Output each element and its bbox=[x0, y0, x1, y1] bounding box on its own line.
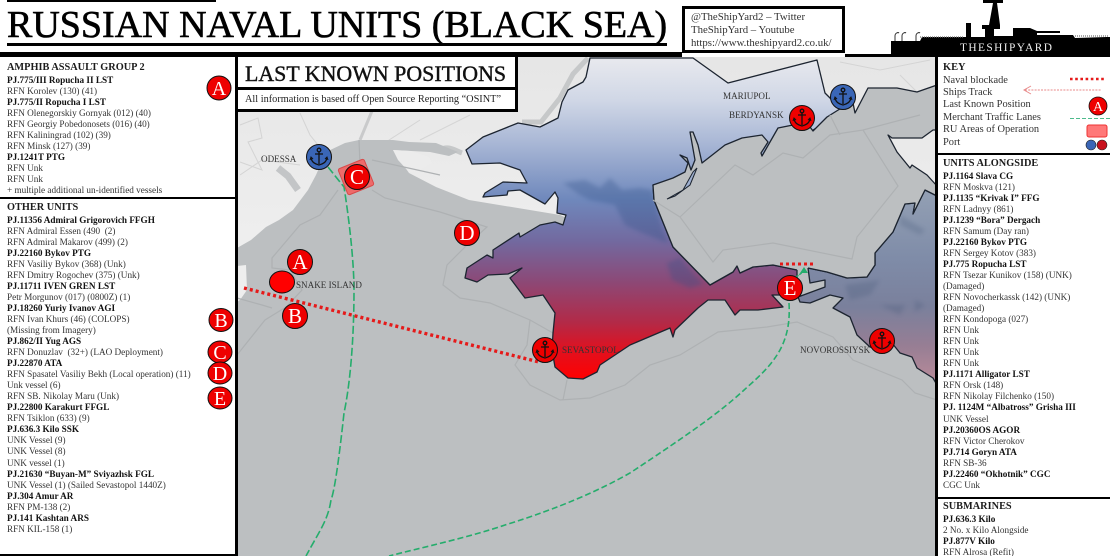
unit list: other: PJ.11356 Admiral Grigorovich FFGH bbox=[7, 214, 155, 224]
unit list: other: RFN Ivan Khurs (46) (COLOPS) bbox=[7, 314, 130, 324]
unit list: amphib: RFN Unk bbox=[7, 163, 43, 173]
unit list: alongside: RFN Unk bbox=[943, 336, 979, 346]
unit list: other: RFN PM-138 (2) bbox=[7, 502, 70, 512]
Arbat lagoon sliver bbox=[667, 168, 697, 199]
heading: key: KEY bbox=[943, 62, 966, 73]
unit list: other: UNK Vessel (9) bbox=[7, 435, 66, 445]
marker: D: D bbox=[459, 221, 475, 245]
panel: amphib assault group 2 bbox=[0, 57, 235, 197]
marker: C bbox=[344, 164, 370, 190]
unit list: other bbox=[7, 214, 191, 534]
social links box: @TheShipYard2 – Twitter TheShipYard – Youtube https://www.theshipyard2.co.uk/ bbox=[691, 11, 832, 49]
marker: B bbox=[282, 304, 308, 328]
unit list: alongside: (Damaged) bbox=[943, 303, 984, 313]
unit list: alongside: RFN Samum (Day ran) bbox=[943, 226, 1029, 236]
panel: other units bbox=[0, 199, 235, 554]
unit list: alongside: RFN Moskva (121) bbox=[943, 182, 1015, 192]
unit list: alongside: PJ.1135 “Krivak I” FFG bbox=[943, 193, 1039, 203]
marker: C: C bbox=[350, 165, 364, 189]
marker: E bbox=[778, 276, 802, 300]
marker: Mariupol port bbox=[830, 84, 856, 110]
unit list: submarines: 2 No. x Kilo Alongside bbox=[943, 525, 1028, 535]
unit list: alongside: PJ.1164 Slava CG bbox=[943, 170, 1013, 180]
place labels: ODESSA bbox=[261, 154, 297, 164]
unit list: alongside: PJ.1171 Alligator LST bbox=[943, 369, 1030, 379]
unit list: other: PJ.11711 IVEN GREN LST bbox=[7, 281, 115, 291]
panel: units alongside bbox=[937, 155, 1110, 497]
left panel frame bbox=[235, 57, 238, 556]
top accent bar bbox=[7, 0, 216, 2]
place labels: SEVASTOPOL bbox=[562, 345, 619, 355]
panel: key bbox=[937, 57, 1110, 153]
unit list: amphib: PJ.1241T PTG bbox=[7, 152, 65, 162]
place labels: SNAKE ISLAND bbox=[296, 280, 362, 290]
marker: E: E bbox=[784, 276, 796, 300]
marker: Sevastopol port bbox=[532, 338, 558, 362]
unit list: other: (Missing from Imagery) bbox=[7, 325, 96, 335]
maritime boundary lines bbox=[237, 140, 937, 400]
marker: Novorossiysk port bbox=[870, 328, 894, 354]
unit list: amphib: RFN Minsk (127) (39) bbox=[7, 141, 90, 151]
merchant traffic lane: Kerch bbox=[389, 303, 789, 556]
heading: units alongside: UNITS ALONGSIDE bbox=[943, 158, 1038, 169]
marker: A: A bbox=[292, 250, 308, 274]
panel: submarines bbox=[937, 499, 1110, 556]
marker: A list bbox=[206, 76, 232, 100]
unit list: alongside: RFN SB-36 bbox=[943, 458, 987, 468]
unit list: alongside: RFN Kondopoga (027) bbox=[943, 314, 1028, 324]
unit list: other: PJ.141 Kashtan ARS bbox=[7, 513, 89, 523]
unit list: other: RFN KIL-158 (1) bbox=[7, 524, 72, 534]
key symbols: A bbox=[1093, 100, 1104, 115]
title: RUSSIAN NAVAL UNITS (BLACK SEA) bbox=[7, 4, 667, 46]
marker: Berdyansk port bbox=[790, 106, 814, 130]
panel: OSINT note: All information is based off Open Source Reporting “OSINT” bbox=[245, 94, 501, 105]
markers: B C D E list: D bbox=[213, 363, 227, 385]
unit list: other: RFN Admiral Makarov (499) (2) bbox=[7, 237, 128, 247]
unit list: amphib bbox=[7, 74, 162, 195]
heading: submarines: SUBMARINES bbox=[943, 501, 1012, 512]
unit list: other: RFN Spasatel Vasiliy Bekh (Local operation) (11) bbox=[7, 369, 191, 379]
markers: B C D E list bbox=[208, 308, 234, 410]
unit list: other: PJ.21630 “Buyan-M” Sviyazhsk FGL bbox=[7, 469, 154, 479]
panel: last known positions heading: LAST KNOWN POSITIONS bbox=[245, 61, 506, 86]
sea bbox=[237, 140, 937, 556]
Sea of Azov bbox=[653, 85, 937, 285]
unit list: submarines bbox=[943, 514, 1028, 556]
unit list: other: PJ.304 Amur AR bbox=[7, 491, 73, 501]
unit list: alongside: PJ. 1124M “Albatross” Grisha III bbox=[943, 402, 1076, 412]
unit list: alongside: RFN Victor Cherokov bbox=[943, 436, 1024, 446]
unit list: alongside: RFN Tsezar Kunikov (158) (UNK) bbox=[943, 270, 1072, 280]
merchant traffic lane: Odessa bbox=[306, 167, 354, 556]
unit list: amphib: RFN Unk bbox=[7, 174, 43, 184]
unit list: amphib: RFN Korolev (130) (41) bbox=[7, 86, 97, 96]
unit list: other: PJ.22800 Karakurt FFGL bbox=[7, 402, 109, 412]
heading: other units: OTHER UNITS bbox=[7, 202, 78, 213]
unit list: alongside: RFN Unk bbox=[943, 347, 979, 357]
unit list: other: PJ.22160 Bykov PTG bbox=[7, 248, 91, 258]
marker: D bbox=[454, 220, 480, 246]
unit list: submarines: PJ.877V Kilo bbox=[943, 536, 995, 546]
Russian operating area gradient: Crimea and southern Ukraine bbox=[465, 58, 843, 379]
marker: A list: A bbox=[212, 78, 227, 100]
unit list: other: Petr Morgunov (017) (0800Z) (1) bbox=[7, 292, 130, 302]
unit list: other: UNK Vessel (1) (Sailed Sevastopol 1440Z) bbox=[7, 480, 166, 490]
unit list: alongside: PJ.22160 Bykov PTG bbox=[943, 237, 1027, 247]
header rule right bbox=[845, 54, 1110, 57]
unit list: other: RFN Vasiliy Bykov (368) (Unk) bbox=[7, 259, 126, 269]
divider right lower bbox=[937, 497, 1110, 499]
unit list: alongside bbox=[943, 170, 1076, 490]
land background bbox=[237, 57, 937, 556]
marker: A bbox=[288, 250, 312, 274]
marker: Snake Island bbox=[270, 271, 294, 293]
key labels: Naval blockade Ships Track Last Known Position Merchant Traffic Lanes RU Areas of Operation Port bbox=[943, 74, 1041, 148]
unit list: other: RFN Donuzlav (32+) (LAO Deployment) bbox=[7, 347, 163, 357]
unit list: amphib: RFN Kaliningrad (102) (39) bbox=[7, 130, 111, 140]
unit list: amphib: PJ.775/III Ropucha II LST bbox=[7, 74, 113, 84]
unit list: other: RFN Dmitry Rogochev (375) (Unk) bbox=[7, 270, 140, 280]
unit list: alongside: PJ.714 Goryn ATA bbox=[943, 447, 1017, 457]
unit list: alongside: PJ.20360OS AGOR bbox=[943, 425, 1020, 435]
place labels bbox=[261, 91, 871, 355]
place labels: BERDYANSK bbox=[729, 110, 784, 120]
unit list: other: PJ.862/II Yug AGS bbox=[7, 336, 81, 346]
unit list: other: Unk vessel (6) bbox=[7, 380, 61, 390]
unit list: alongside: UNK Vessel bbox=[943, 414, 989, 424]
unit list: amphib: RFN Olenegorskiy Gornyak (012) (40) bbox=[7, 108, 151, 118]
ru area of operation C bbox=[338, 159, 374, 195]
snake island coast fragment bbox=[237, 265, 247, 302]
unit list: alongside: (Damaged) bbox=[943, 281, 984, 291]
sea bed shading over Crimea bbox=[563, 178, 703, 288]
unit list: submarines: PJ.636.3 Kilo bbox=[943, 514, 995, 524]
unit list: alongside: RFN Nikolay Filchenko (150) bbox=[943, 391, 1054, 401]
unit list: alongside: RFN Unk bbox=[943, 325, 979, 335]
unit list: other: PJ.22870 ATA bbox=[7, 358, 62, 368]
ships track arrow bbox=[796, 267, 808, 277]
markers: B C D E list: E bbox=[214, 388, 226, 410]
unit list: amphib: RFN Georgiy Pobedonosets (016) (40) bbox=[7, 119, 150, 129]
unit list: other: PJ.636.3 Kilo SSK bbox=[7, 424, 79, 434]
divider left bbox=[0, 197, 235, 199]
markers: B C D E list: C bbox=[213, 342, 227, 364]
naval blockade line: Kerch Strait bbox=[780, 262, 814, 266]
unit list: amphib: + multiple additional un-identified vessels bbox=[7, 185, 162, 195]
unit list: other: RFN Admiral Essen (490 (2) bbox=[7, 226, 115, 236]
Dnipro river and estuary bbox=[522, 58, 588, 122]
unit list: amphib: PJ.775/II Ropucha I LST bbox=[7, 97, 106, 107]
unit list: alongside: RFN Ladnyy (861) bbox=[943, 204, 1013, 214]
unit list: alongside: CGC Unk bbox=[943, 480, 980, 490]
unit list: alongside: RFN Novocherkassk (142) (UNK) bbox=[943, 292, 1070, 302]
Taman and Russian Black Sea coast gradient bbox=[798, 190, 937, 385]
unit list: other: PJ.18260 Yuriy Ivanov AGI bbox=[7, 303, 115, 313]
key symbols bbox=[1023, 78, 1110, 150]
unit list: alongside: RFN Sergey Kotov (383) bbox=[943, 248, 1036, 258]
unit list: alongside: PJ.775 Ropucha LST bbox=[943, 259, 1026, 269]
unit list: alongside: RFN Orsk (148) bbox=[943, 380, 1003, 390]
right panel frame bbox=[935, 55, 938, 556]
unit list: other: UNK vessel (1) bbox=[7, 458, 65, 468]
marker: B: B bbox=[288, 304, 302, 328]
place labels: NOVOROSSIYSK bbox=[800, 345, 871, 355]
marker: Odessa port bbox=[306, 144, 332, 170]
panel: OSINT note bbox=[237, 90, 518, 112]
social links box bbox=[682, 6, 845, 53]
unit list: alongside: PJ.22460 “Okhotnik” CGC bbox=[943, 469, 1050, 479]
heading: amphib assault group: AMPHIB ASSAULT GROUP 2 bbox=[7, 62, 145, 73]
markers: B C D E list: B bbox=[214, 310, 228, 332]
unit list: alongside: RFN Unk bbox=[943, 358, 979, 368]
header rule bbox=[0, 52, 682, 57]
rivers on land bbox=[240, 60, 930, 175]
ship logo: THESHIPYARD bbox=[960, 42, 1052, 54]
unit list: other: UNK Vessel (8) bbox=[7, 446, 66, 456]
Kinburn spit bbox=[393, 150, 432, 172]
unit list: other: RFN SB. Nikolay Maru (Unk) bbox=[7, 391, 119, 401]
place labels: MARIUPOL bbox=[723, 91, 771, 101]
left panel bottom edge bbox=[0, 554, 236, 556]
Azov maritime boundary bbox=[653, 115, 920, 262]
sea bed shading off Taman bbox=[845, 215, 925, 315]
naval blockade line: Snake Island to Sevastopol bbox=[244, 288, 539, 362]
divider right upper bbox=[937, 153, 1110, 155]
unit list: alongside: PJ.1239 “Bora” Dergach bbox=[943, 215, 1040, 225]
unit list: other: RFN Tsiklon (633) (9) bbox=[7, 413, 90, 423]
